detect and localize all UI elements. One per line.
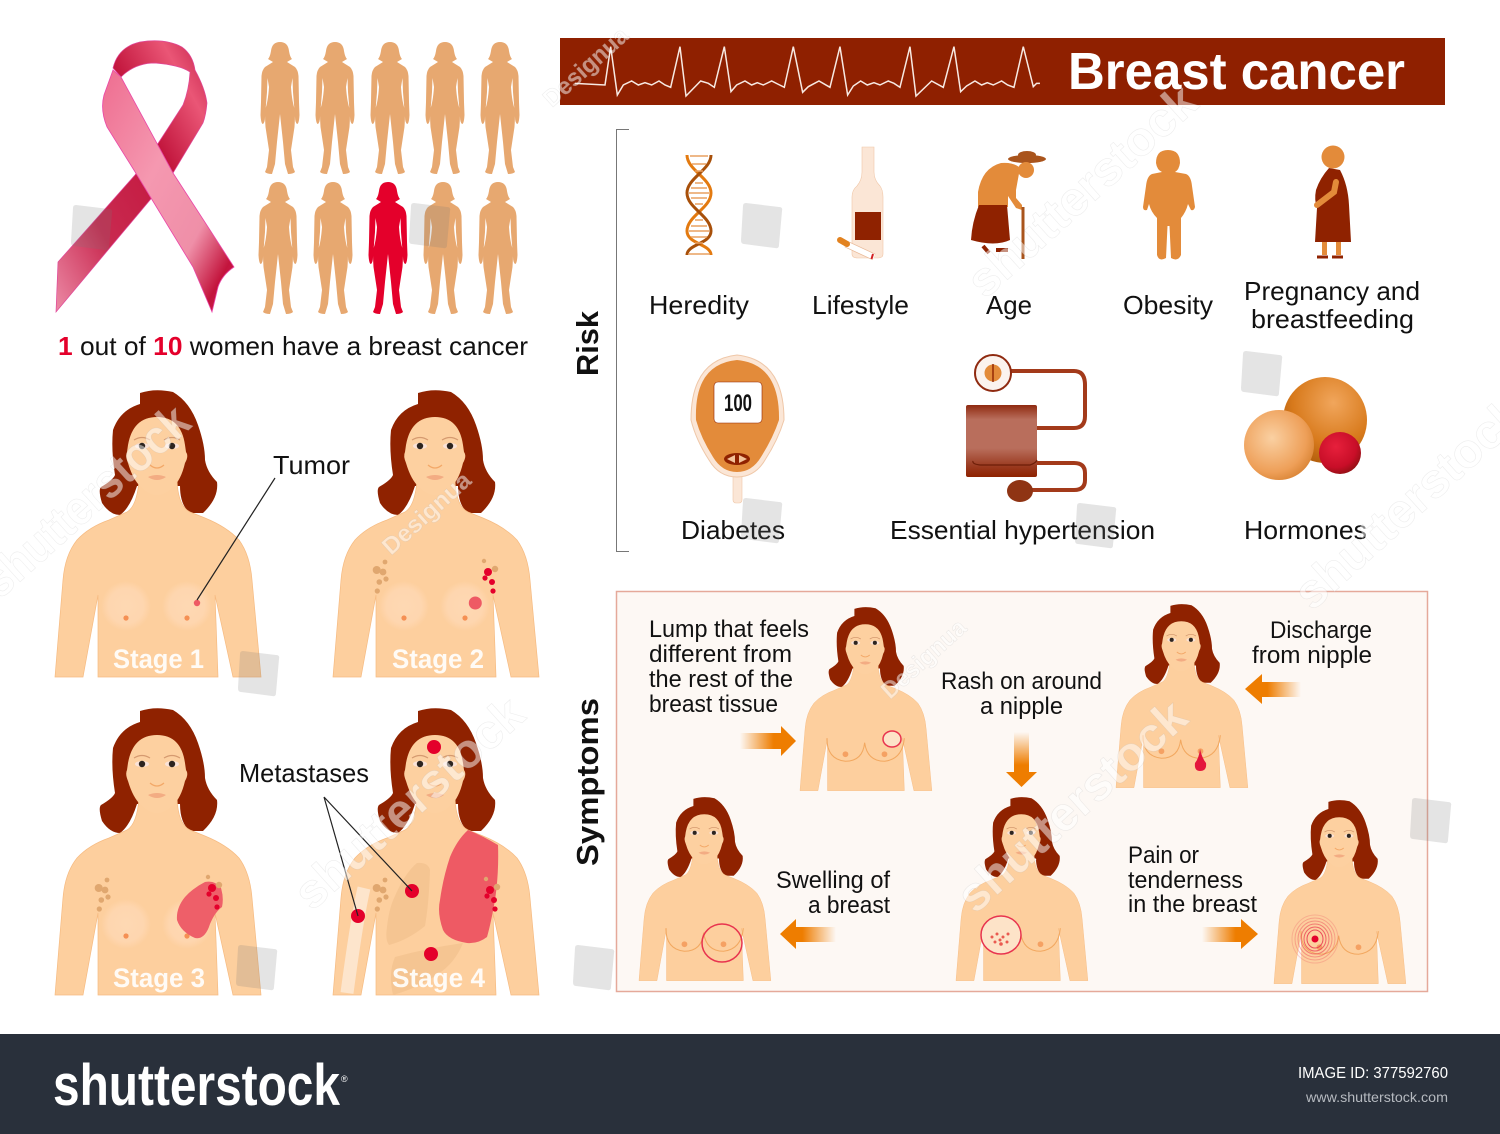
metastases label: Metastases: [239, 758, 369, 788]
symptom: lump: [649, 607, 932, 791]
footer bar: ®: [341, 1074, 348, 1084]
risk heading: Risk: [570, 310, 605, 376]
watermarks: shutterstock: [284, 687, 535, 920]
hormones label: Hormones: [1244, 515, 1367, 545]
symptom: discharge: [1116, 604, 1372, 788]
enlarged tumor: [439, 830, 498, 943]
icon: wine bottle and cigarette: [840, 147, 883, 259]
footer bar: IMAGE ID: 377592760: [1298, 1065, 1448, 1082]
essential hypertension label: Essential hypertension: [890, 515, 1155, 545]
panel: symptoms: [616, 592, 1428, 992]
icon: obese person: [1143, 150, 1195, 259]
symptom: discharge: from nipple: [1252, 642, 1372, 669]
symptom: discharge: Discharge: [1270, 617, 1372, 644]
symptom: swelling: [639, 797, 890, 981]
header banner: [560, 38, 1445, 105]
symptom: rash: a nipple: [980, 693, 1063, 720]
watermarks: shutterstock: [957, 75, 1208, 308]
lung organ: [386, 863, 430, 945]
diabetes label: Diabetes: [681, 515, 785, 545]
watermarks: Designua: [377, 466, 477, 560]
age label: Age: [986, 290, 1032, 320]
header banner: Breast cancer: [1068, 43, 1405, 101]
stage 3 figure: Stage 3: [113, 963, 205, 993]
stage 1 figure: Stage 1: [113, 644, 204, 674]
icon: glucose meter: 100: [724, 390, 752, 417]
liver organ: [391, 943, 463, 995]
stage 3 figure: [55, 708, 261, 995]
stage 4 figure: Stage 4: [392, 963, 485, 993]
breastfeeding label: breastfeeding: [1251, 304, 1414, 334]
watermarks: shutterstock: [947, 690, 1198, 923]
risk bracket: [616, 130, 629, 552]
symptom: swelling: Swelling of: [776, 867, 890, 894]
symptom: pain: tenderness: [1128, 867, 1243, 894]
lifestyle label: Lifestyle: [812, 290, 909, 320]
symptom: pain: in the breast: [1128, 891, 1257, 918]
watermarks: Designua: [876, 614, 973, 704]
stage 2 figure: [333, 390, 539, 677]
footer bar: shutterstock: [53, 1053, 341, 1118]
metastases pointer lines: [324, 797, 412, 916]
icon: blood pressure cuff: [966, 355, 1085, 502]
tumor pointer line: [197, 478, 275, 600]
symptom: lump: the rest of the: [649, 666, 793, 693]
stage 1 figure: [55, 390, 261, 677]
symptom: pain: Pain or: [1128, 842, 1199, 869]
icon: hormone spheres: [1244, 377, 1367, 480]
icon: DNA: [687, 155, 711, 255]
symptom: lump: different from: [649, 641, 792, 668]
watermarks: Designua: [538, 22, 635, 112]
heredity label: Heredity: [649, 290, 749, 320]
icon: glucose meter: [691, 355, 784, 503]
symptom: lump: Lump that feels: [649, 616, 809, 643]
ten women silhouettes: [258, 42, 520, 314]
metastasis dots: [351, 740, 441, 961]
symptom: swelling: a breast: [808, 892, 890, 919]
pink awareness ribbon: [56, 41, 234, 312]
symptom: rash: [941, 668, 1102, 981]
statistic caption: 1 out of 10 women have a breast cancer: [58, 331, 528, 361]
symptoms heading: Symptoms: [570, 698, 605, 866]
icon: pregnant woman: [1315, 146, 1351, 257]
arm bone: [347, 888, 364, 993]
footer bar: [0, 1034, 1500, 1134]
stage 4 figure: [333, 708, 539, 995]
symptom: pain: [1128, 800, 1406, 984]
obesity label: Obesity: [1123, 290, 1213, 320]
stage 2 figure: Stage 2: [392, 644, 484, 674]
symptom: lump: breast tissue: [649, 691, 778, 718]
symptom: rash: Rash on around: [941, 668, 1102, 695]
tumor label: Tumor: [273, 450, 350, 480]
pregnancy label: Pregnancy and: [1244, 276, 1420, 306]
icon: elderly woman with cane: [971, 151, 1046, 259]
footer bar: www.shutterstock.com: [1305, 1089, 1448, 1105]
